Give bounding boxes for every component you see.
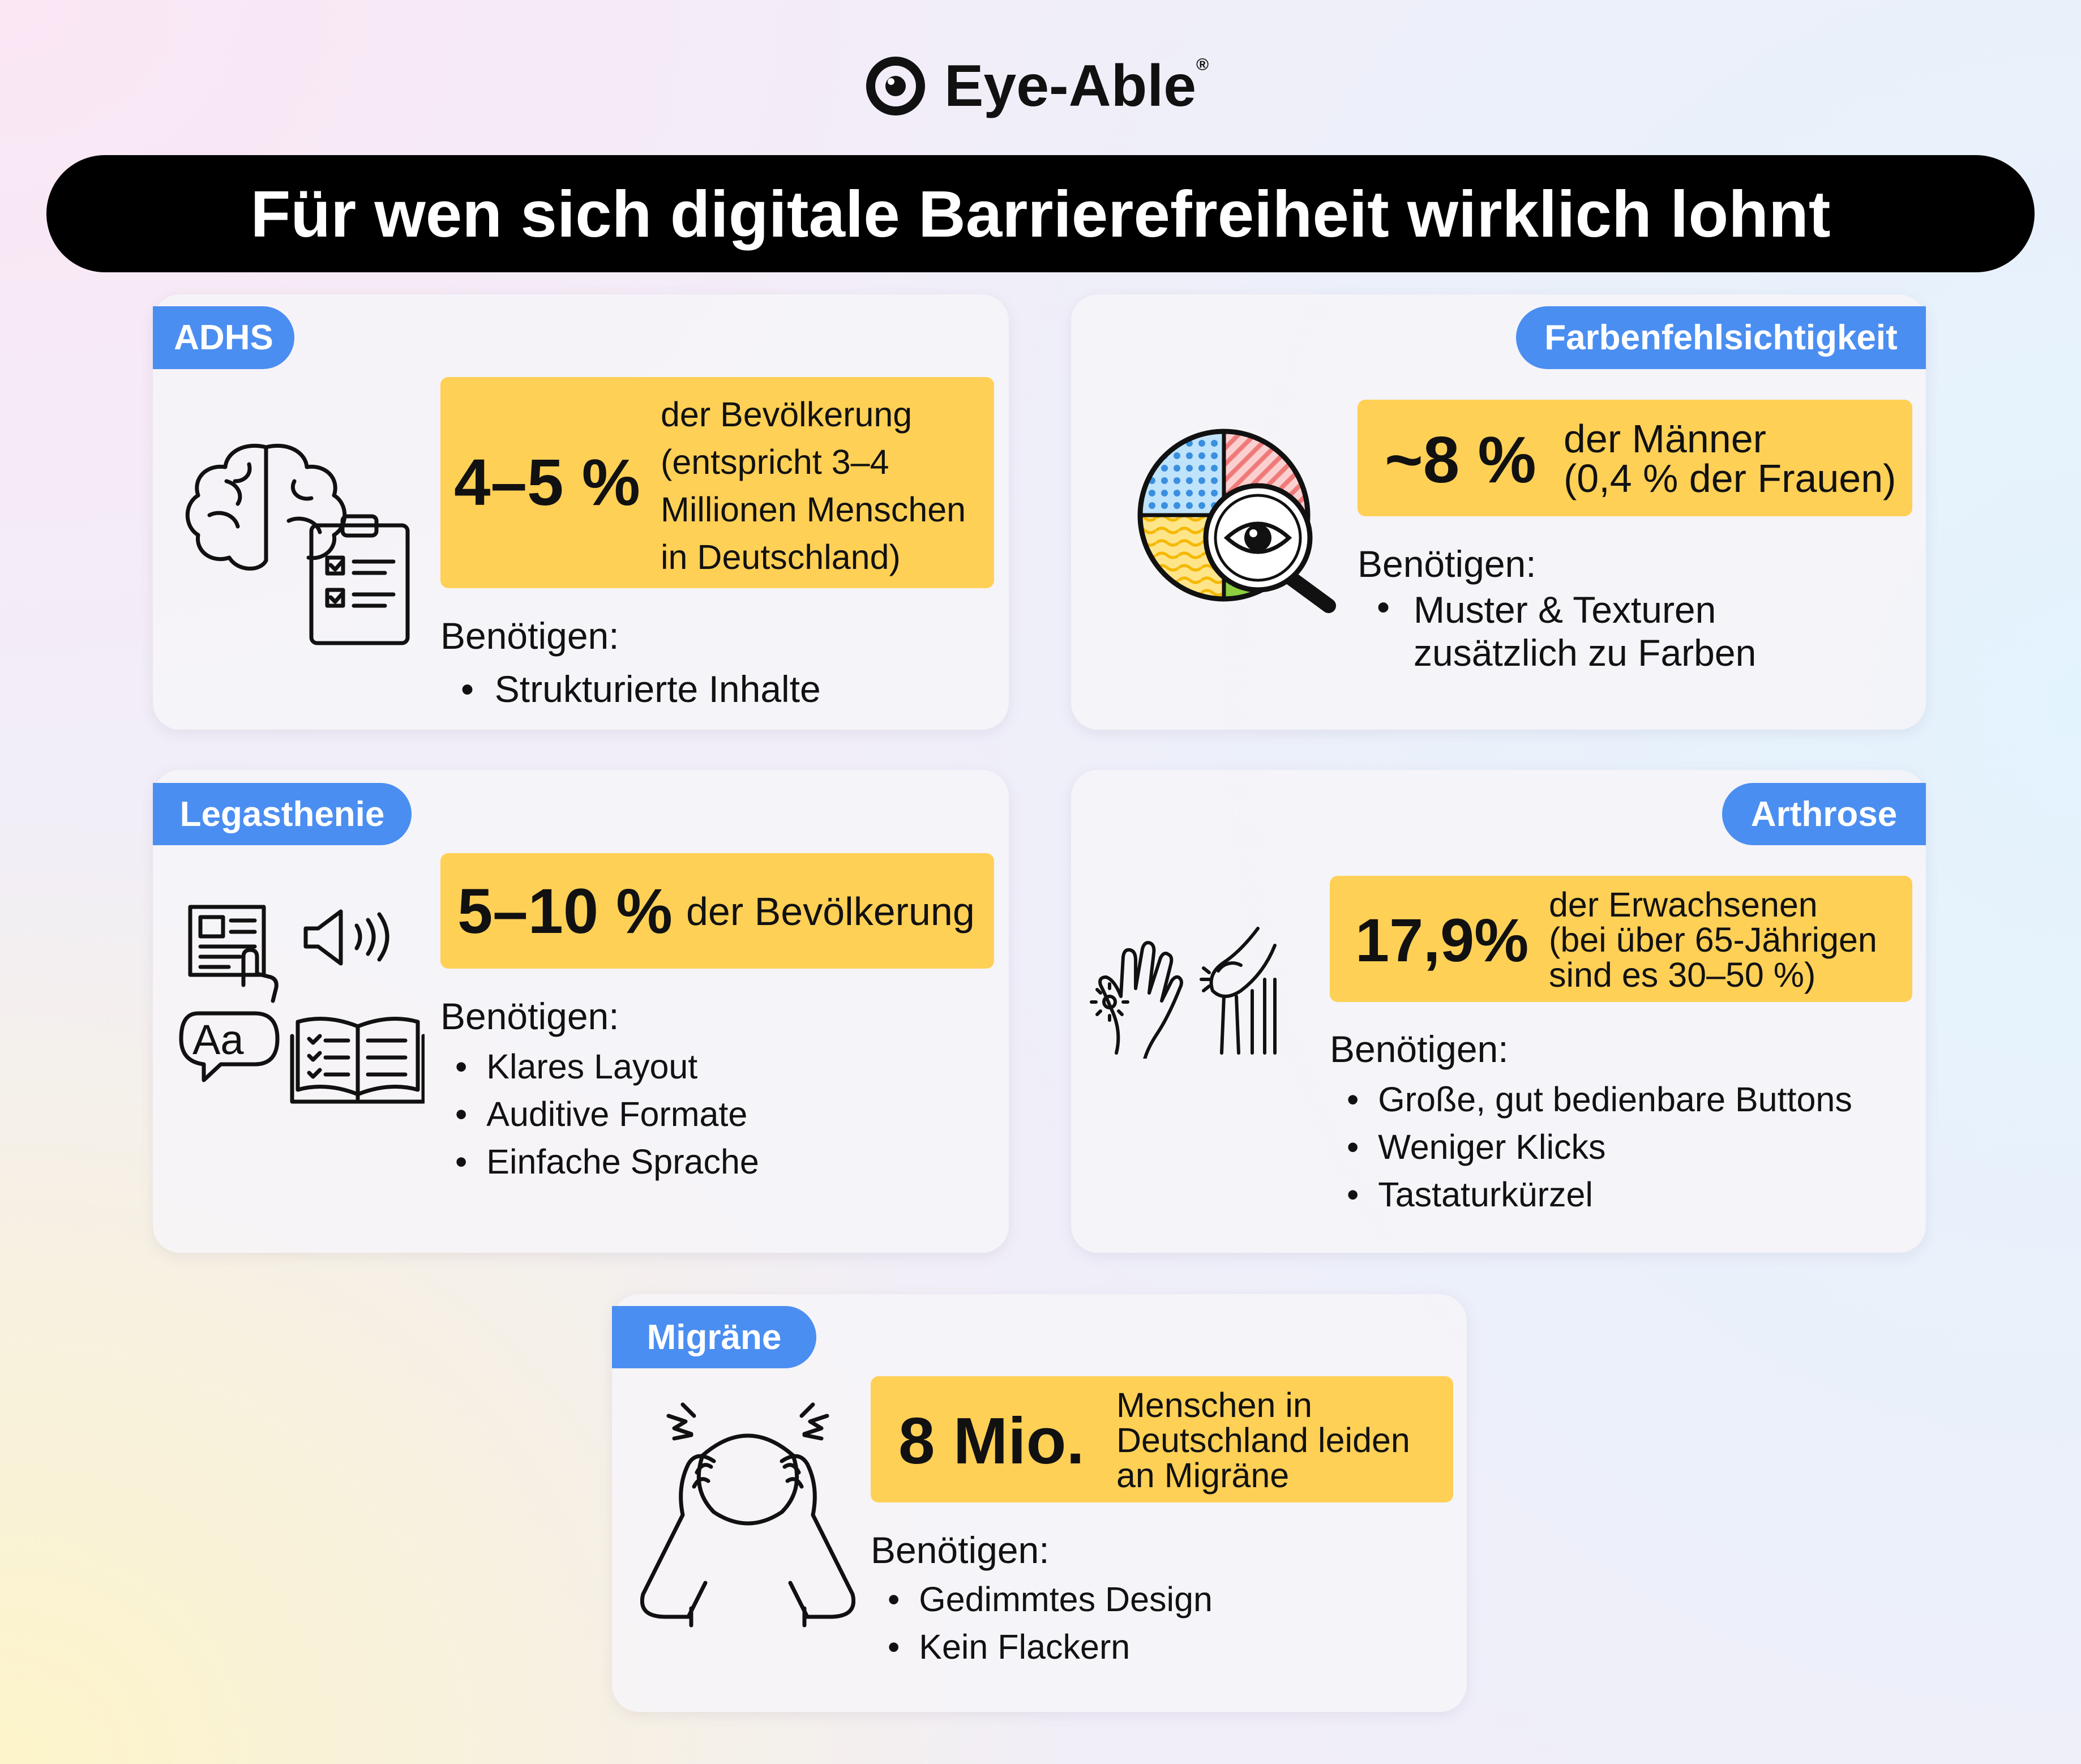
- tag: Farbenfehlsichtigkeit: [1516, 306, 1926, 369]
- icon: color pie with magnifier: [1138, 429, 1336, 613]
- needs: Farben: zusätzlich zu Farben: [1414, 632, 1756, 674]
- needs: Farben: Benötigen:: [1358, 543, 1536, 585]
- stat box: 8 Mio.: 8 Mio.: [898, 1404, 1085, 1478]
- icons: hand and knee: [1090, 927, 1277, 1059]
- needs: Legasthenie: • Einfache Sprache: [455, 1142, 759, 1181]
- title bar: Für wen sich digitale Barrierefreiheit wirklich lohnt: [250, 177, 1831, 250]
- tag: Legasthenie: [153, 783, 412, 845]
- stat box: 17,9%: (bei über 65-Jährigen: [1549, 920, 1877, 959]
- needs: Migräne: • Kein Flackern: [888, 1628, 1130, 1666]
- needs: Farben: [1358, 543, 1756, 674]
- needs: ADHS: Benötigen:: [440, 615, 619, 657]
- stat box: ~8 %: der Männer: [1564, 417, 1766, 461]
- icon: brain and clipboard: [186, 444, 410, 645]
- needs: Arthrose: • Weniger Klicks: [1347, 1128, 1606, 1166]
- logo text: Eye-Able®: [944, 53, 1209, 119]
- panel: ADHS: [153, 294, 1009, 730]
- icon: logo eye: [866, 57, 925, 115]
- needs: Legasthenie: • Auditive Formate: [455, 1095, 747, 1133]
- tag: Arthrose: Arthrose: [1751, 795, 1897, 833]
- tag: Migräne: Migräne: [647, 1318, 781, 1356]
- needs: Arthrose: • Tastaturkürzel: [1347, 1175, 1593, 1214]
- panel: Legasthenie: [153, 770, 1009, 1253]
- stat box: 8 Mio.: an Migräne: [1116, 1456, 1289, 1495]
- stat box: 5-10 %: [440, 853, 994, 969]
- stat box: 5-10 %: 5–10 %: [457, 876, 673, 947]
- tag: Legasthenie: Legasthenie: [180, 795, 384, 833]
- needs: Legasthenie: [440, 995, 759, 1181]
- icons: document, speaker, Aa bubble, book: [179, 905, 425, 1104]
- needs: Arthrose: • Große, gut bedienbare Buttons: [1347, 1080, 1852, 1119]
- stat box: 4-5 %: Millionen Menschen: [661, 490, 966, 529]
- icon: person with headache: [640, 1403, 855, 1627]
- stat box: 5-10 %: der Bevölkerung: [686, 889, 975, 934]
- needs: Legasthenie: • Klares Layout: [455, 1047, 697, 1086]
- stat box: ~8 %: ~8 %: [1385, 423, 1536, 496]
- needs: Legasthenie: Benötigen:: [440, 995, 619, 1037]
- stat box: 17,9%: der Erwachsenen: [1549, 885, 1818, 924]
- stat box: 4-5 %: 4–5 %: [454, 446, 640, 519]
- needs: Farben: Muster & Texturen: [1414, 589, 1716, 631]
- tag: Migräne: [612, 1306, 816, 1368]
- stat box: 4-5 %: [440, 377, 994, 588]
- stat box: 17,9%: [1330, 876, 1912, 1002]
- stat box: ~8 %: [1358, 400, 1912, 516]
- panel: Farbenfehlsichtigkeit: [1071, 294, 1926, 730]
- stat box: 17,9%: sind es 30–50 %): [1549, 956, 1815, 994]
- tag: ADHS: [153, 306, 294, 369]
- needs: ADHS: • Strukturierte Inhalte: [461, 668, 821, 710]
- stat box: 8 Mio.: Deutschland leiden: [1116, 1421, 1410, 1459]
- stat box: 17,9%: 17,9%: [1355, 906, 1528, 974]
- needs: Arthrose: Benötigen:: [1330, 1028, 1509, 1070]
- stat box: ~8 %: (0,4 % der Frauen): [1564, 456, 1896, 500]
- needs: Migräne: [871, 1529, 1213, 1666]
- logo: [866, 53, 1209, 119]
- stat box: 4-5 %: in Deutschland): [661, 538, 901, 576]
- needs: Migräne: Benötigen:: [871, 1529, 1050, 1571]
- stat box: 8 Mio.: Menschen in: [1116, 1386, 1312, 1424]
- needs: ADHS: [440, 615, 821, 710]
- tag: ADHS: ADHS: [174, 318, 273, 357]
- stat box: 8 Mio.: [871, 1376, 1453, 1502]
- stat box: 4-5 %: (entspricht 3–4: [661, 443, 889, 481]
- tag: Farbenfehlsichtigkeit: Farbenfehlsichtigkeit: [1544, 318, 1898, 357]
- panel: Migräne: [612, 1294, 1467, 1712]
- stat box: 4-5 %: der Bevölkerung: [661, 395, 912, 434]
- tag: Arthrose: [1722, 783, 1926, 845]
- title bar: [46, 155, 2035, 272]
- icons: document, speaker, Aa bubble, book: Aa: [192, 1016, 244, 1063]
- needs: Migräne: • Gedimmtes Design: [888, 1580, 1213, 1619]
- panel: Arthrose: [1071, 770, 1926, 1253]
- needs: Arthrose: [1330, 1028, 1852, 1214]
- needs: Farben: •: [1377, 586, 1390, 628]
